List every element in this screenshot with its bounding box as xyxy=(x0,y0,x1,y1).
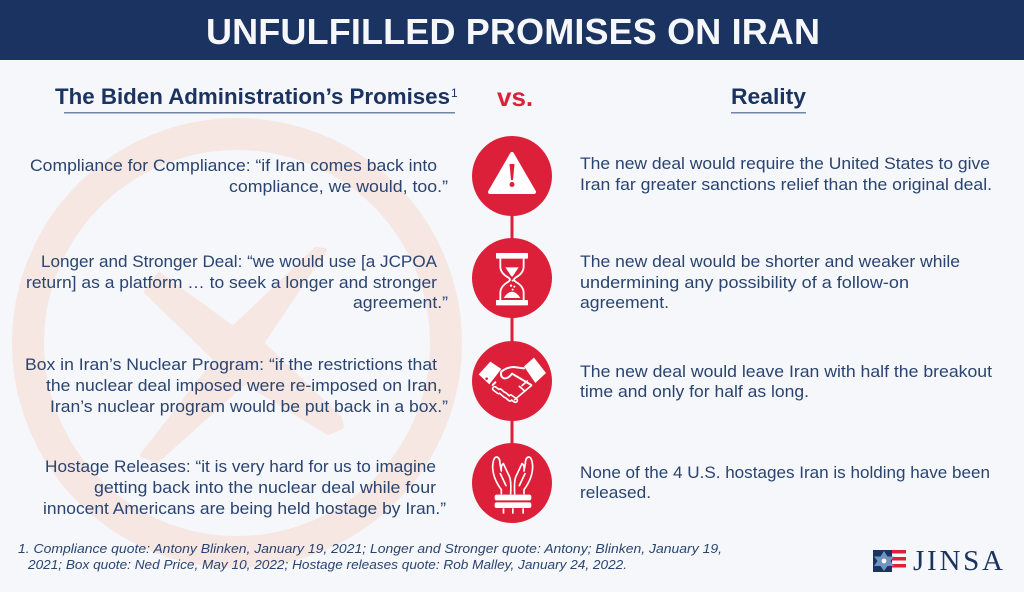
heading: vs.: vs. xyxy=(497,82,533,112)
watermark: crossed-out circle xyxy=(28,134,446,552)
promise 1 text: compliance, we would, too.” xyxy=(229,177,448,196)
promise 3 text: Iran’s nuclear program would be put back in a box.” xyxy=(50,397,448,416)
promise 2 text: Longer and Stronger Deal: “we would use [a JCPOA xyxy=(41,252,438,271)
logo: JINSA xyxy=(873,545,1003,577)
promise 2 text xyxy=(26,252,448,312)
footnote: 1. Compliance quote: Antony Blinken, January 19, 2021; Longer and Stronger quote: Antony; Blinken, January 19, xyxy=(18,542,722,556)
reality 3 text: The new deal would leave Iran with half the breakout xyxy=(580,362,992,381)
heading: promises: The Biden Administration’s Promises xyxy=(55,84,450,109)
logo: JINSA: JINSA xyxy=(913,545,1003,577)
title banner xyxy=(0,0,1024,60)
promise 2 text: agreement.” xyxy=(353,293,448,312)
icon: warning triangle xyxy=(472,136,552,216)
reality 2 text xyxy=(580,252,960,312)
reality 4 text xyxy=(580,463,990,502)
promise 3 text: Box in Iran’s Nuclear Program: “if the restrictions that xyxy=(25,355,437,374)
footnote xyxy=(18,542,722,572)
promise 4 text: innocent Americans are being held hostage by Iran.” xyxy=(43,499,446,518)
promise 2 text: return] as a platform … to seek a longer and stronger xyxy=(26,273,437,292)
promise 4 text: getting back into the nuclear deal while four xyxy=(94,478,436,497)
icon: hourglass xyxy=(472,238,552,318)
icon: bound hands xyxy=(472,443,552,523)
promise 3 text xyxy=(25,355,448,416)
promise 1 text xyxy=(30,156,448,196)
timeline connector xyxy=(510,176,514,483)
reality 3 text xyxy=(580,362,992,401)
reality 1 text: The new deal would require the United States to give xyxy=(580,154,990,173)
icon: handshake xyxy=(472,341,552,421)
footnote: 2021; Box quote: Ned Price, May 10, 2022; Hostage releases quote: Rob Malley, January 24, 2022. xyxy=(27,558,627,572)
reality 4 text: released. xyxy=(580,483,651,502)
reality 2 text: undermining any possibility of a follow-on xyxy=(580,273,909,292)
heading: promises: 1 xyxy=(451,86,458,100)
heading: reality: Reality xyxy=(731,84,807,109)
reality 2 text: agreement. xyxy=(580,293,669,312)
promise 1 text: Compliance for Compliance: “if Iran comes back into xyxy=(30,156,437,175)
reality 2 text: The new deal would be shorter and weaker while xyxy=(580,252,960,271)
reality 3 text: time and only for half as long. xyxy=(580,382,809,401)
reality 1 text: Iran far greater sanctions relief than the original deal. xyxy=(580,175,992,194)
promise 4 text xyxy=(43,457,446,518)
promise 3 text: the nuclear deal imposed were re-imposed on Iran, xyxy=(46,376,442,395)
title banner: UNFULFILLED PROMISES ON IRAN xyxy=(206,11,820,52)
reality 1 text xyxy=(580,154,992,194)
promise 4 text: Hostage Releases: “it is very hard for us to imagine xyxy=(45,457,436,476)
reality 4 text: None of the 4 U.S. hostages Iran is holding have been xyxy=(580,463,990,482)
